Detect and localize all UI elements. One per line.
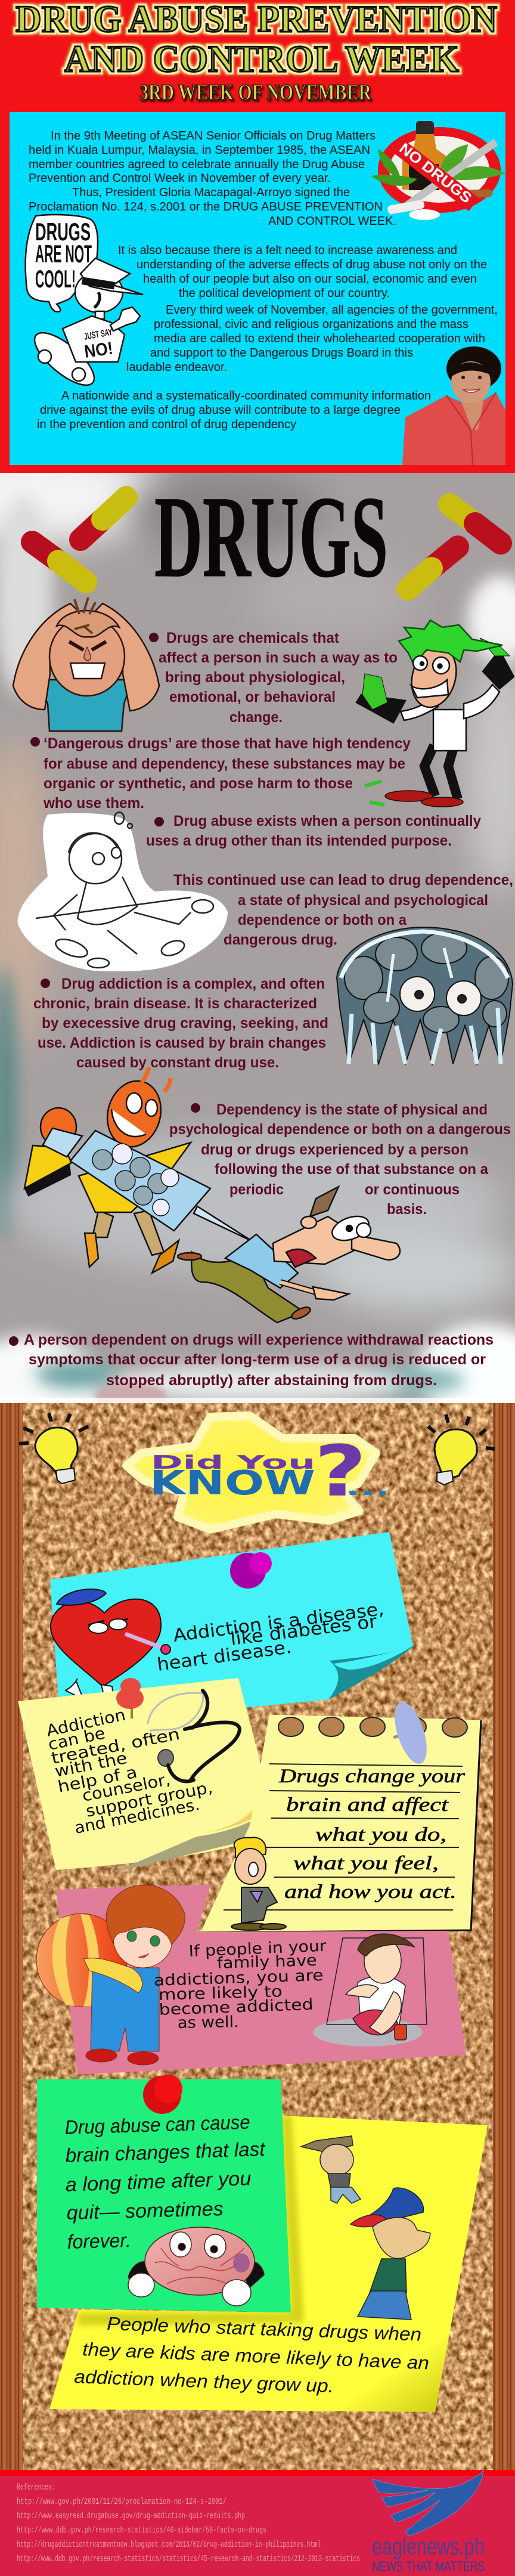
note: family addictions	[36, 1884, 466, 2075]
note text: Addiction is a disease,	[172, 1599, 385, 1646]
introduction text	[29, 129, 498, 431]
note text	[64, 2111, 266, 2253]
logo: eagle news: eaglenews.ph	[372, 2534, 485, 2560]
introduction text: health of our people but also on our social, economic and even	[143, 272, 477, 286]
illustration: worried man	[231, 1837, 286, 1930]
note text: support group,	[84, 1778, 214, 1821]
text: dangerous drugs: organic or synthetic, and pose harm to those	[44, 775, 353, 792]
heading: did you know: ?	[314, 1430, 367, 1512]
introduction text: laudable endeavor.	[126, 360, 227, 374]
note text: with the	[53, 1749, 129, 1781]
text: withdrawal: A person dependent on drugs will experience withdrawal reactions	[24, 1332, 494, 1348]
introduction text: Every third week of November, all agencies of the government,	[166, 303, 498, 317]
note: drugs change your brain	[201, 1698, 481, 1933]
panel: header background	[0, 0, 515, 473]
note text: what you do,	[315, 1824, 446, 1846]
note text: Drug abuse can cause	[64, 2111, 250, 2138]
text: drugs are chemicals: change.	[229, 709, 283, 726]
panel: corkboard	[0, 1403, 515, 2470]
icon: magenta pin	[230, 1552, 272, 1589]
speech bubble: ARE NOT	[35, 240, 92, 268]
references: References:	[17, 2482, 55, 2493]
illustration: brain	[128, 2227, 264, 2306]
text: drug addiction	[33, 976, 328, 1071]
text: dangerous drugs: for abuse and dependency, these substances may be	[44, 756, 405, 772]
introduction text: understanding of the adverse effects of drug abuse not only on the	[136, 258, 487, 271]
text: drug abuse: This continued use can lead to drug dependence,	[173, 872, 513, 888]
text: drug abuse: dangerous drug.	[224, 931, 337, 948]
subtitle: 3RD WEEK OF NOVEMBER	[139, 80, 372, 105]
introduction text: AND CONTROL WEEK.	[268, 214, 396, 228]
note text: a long time after you	[65, 2167, 252, 2196]
introduction text: Proclamation No. 124, s.2001 or the DRUG ABUSE PREVENTION	[29, 200, 383, 213]
illustration: sitting kid	[313, 1934, 427, 2046]
note text: become addicted	[159, 1996, 314, 2019]
text: dependency	[169, 1101, 511, 1218]
text: drug addiction: use. Addiction is caused by brain changes	[38, 1035, 326, 1051]
text: withdrawal	[9, 1332, 494, 1389]
introduction text: In the 9th Meeting of ASEAN Senior Officials on Drug Matters	[51, 129, 376, 143]
introduction text: A nationwide and a systematically-coordinated community information	[61, 389, 431, 402]
note text	[74, 2313, 430, 2397]
text: withdrawal: symptoms that occur after long-term use of a drug is reduced or	[29, 1351, 486, 1368]
note text: brain and affect	[286, 1794, 449, 1816]
note text	[45, 1705, 214, 1838]
icon: light bulb left	[19, 1413, 88, 1484]
text: withdrawal: stopped abruptly) after abstaining from drugs.	[106, 1372, 437, 1389]
icon: capsules right	[408, 504, 501, 589]
text: drug abuse: dependence or both on a	[238, 912, 407, 928]
references: http://drugaddictiontreatmentnow.blogspot.com/2013/02/drug-addiction-in-philippines.html	[17, 2540, 321, 2550]
icon: no drugs sign: NO DRUGS	[396, 140, 475, 207]
text: dependency: periodic	[229, 1181, 284, 1198]
text: drug abuse	[146, 813, 513, 948]
speech bubble: COOL!	[35, 265, 76, 293]
text: dependency: Dependency is the state of physical and	[216, 1101, 488, 1118]
text: drugs are chemicals: bring about physiological,	[165, 669, 345, 686]
introduction text: the political development of our country.	[179, 286, 390, 300]
note text	[153, 1937, 327, 2032]
introduction text: professional, civic and religious organizations and the mass	[154, 317, 469, 331]
icon: stethoscope	[148, 1690, 240, 1781]
illustration: devil with syringe	[24, 1067, 253, 1273]
introduction text: held in Kuala Lumpur, Malaysia, in September 1985, the ASEAN	[29, 143, 370, 157]
title	[15, 0, 497, 80]
introduction text: media are called to extend their wholehearted cooperation with	[154, 332, 485, 345]
note text: Addiction	[45, 1705, 128, 1741]
text: drug addiction: chronic, brain disease. It is characterized	[33, 995, 317, 1012]
references	[17, 2482, 360, 2564]
icon: sick heart	[51, 1589, 170, 1705]
note text: forever.	[67, 2229, 131, 2253]
introduction text: member countries agreed to celebrate annually the Drug Abuse	[29, 157, 365, 171]
illustration: big boy in cap	[350, 2188, 430, 2320]
text: drug abuse: uses a drug other than its intended purpose.	[146, 832, 452, 849]
note text: what you feel,	[293, 1853, 439, 1874]
text: dangerous drugs: who use them.	[43, 795, 144, 812]
note text: more likely to	[158, 1983, 283, 2004]
speech bubble	[26, 215, 98, 312]
text: dangerous drugs	[30, 735, 411, 812]
illustration: small slouching guy	[301, 2136, 361, 2203]
text: drug addiction: by execessive drug craving, seeking, and	[42, 1015, 328, 1032]
introduction text: It is also because there is a felt need to increase awareness and	[118, 243, 457, 257]
illustration: drugs are not cool character: JUST SAY	[83, 327, 113, 342]
note text: as well.	[178, 2013, 239, 2032]
note text: brain changes that last	[65, 2138, 266, 2166]
speech bubble: DRUGS	[35, 218, 91, 246]
note text	[278, 1766, 465, 1903]
icon: capsules left	[32, 497, 126, 582]
note: addiction can be treated	[18, 1678, 297, 1872]
note text: and medicines.	[73, 1795, 201, 1838]
illustration: drugs are not cool character	[26, 215, 143, 394]
references: http://www.ddb.gov.ph/research-statistics/46-sidebar/58-facts-on-drugs	[17, 2525, 266, 2535]
illustration: angry boy	[13, 597, 159, 731]
note text: People who start taking drugs when	[107, 2313, 422, 2345]
text: dependency: basis.	[387, 1201, 427, 1218]
text: dependency: or continuous	[365, 1181, 460, 1198]
heading: did you know: KNOW	[150, 1464, 315, 1503]
note text: they are kids are more likely to have an	[82, 2339, 430, 2373]
text: drugs are chemicals: Drugs are chemicals that	[166, 630, 340, 646]
note text: help of a	[56, 1763, 139, 1797]
text: drug abuse: Drug abuse exists when a person continually	[173, 813, 481, 829]
note text: quit— sometimes	[66, 2197, 224, 2224]
illustration: drugs are not cool character: NO!	[83, 339, 114, 362]
title: AND CONTROL WEEK	[64, 38, 459, 80]
text: drugs are chemicals	[149, 630, 398, 726]
note text: addictions, you are	[153, 1967, 324, 1990]
text: drug addiction: Drug addiction is a complex, and often	[61, 976, 325, 992]
text: drug addiction: caused by constant drug use.	[76, 1054, 279, 1071]
references: http://www.gov.ph/2001/11/26/proclamation-no-124-s-2001/	[17, 2497, 227, 2507]
note text	[156, 1599, 385, 1676]
illustration: frozen brain	[337, 927, 513, 1064]
illustration: running man	[178, 1187, 400, 1323]
note: brain changes	[37, 2075, 291, 2312]
icon: red pin	[143, 2075, 182, 2114]
text: drugs are chemicals: emotional, or behavioral	[169, 689, 336, 705]
note: addiction is a disease	[50, 1532, 413, 1708]
references: http://www.easyread.drugabuse.gov/drug-addiction-quiz-results.php	[17, 2511, 245, 2521]
text: dependency: following the use of that substance on a	[215, 1161, 489, 1178]
heading: did you know: ...	[346, 1476, 390, 1500]
note text: heart disease.	[156, 1637, 293, 1676]
note text: can be	[46, 1724, 107, 1754]
icon: light bulb right	[428, 1414, 495, 1485]
panel: introduction	[10, 112, 505, 465]
note text: like diabetes or	[229, 1611, 379, 1650]
panel: footer	[0, 2470, 515, 2576]
introduction text: Prevention and Control Week in November of every year.	[29, 171, 331, 185]
text: dangerous drugs: ‘Dangerous drugs’ are those that have high tendency	[44, 735, 411, 752]
skateboard	[27, 324, 102, 394]
icon: no drugs sign	[371, 121, 505, 220]
heading: did you know: Did You	[151, 1452, 315, 1473]
heading: did you know	[126, 1416, 390, 1530]
note text: If people in your	[188, 1937, 327, 1961]
text: drug abuse: a state of physical and psychological	[238, 892, 488, 909]
illustration: passed out boy	[18, 812, 228, 971]
text: dependency: drug or drugs experienced by a person	[201, 1141, 469, 1158]
introduction text: in the prevention and control of drug dependency	[37, 417, 297, 431]
logo: eagle news	[372, 2470, 485, 2575]
note text: Drugs change your	[278, 1766, 465, 1787]
icon: red pin	[116, 1678, 144, 1719]
note text: treated, often	[49, 1725, 181, 1768]
panel: drugs section background	[0, 447, 515, 1443]
icon: blue tack	[388, 1698, 433, 1767]
note text: and how you act.	[284, 1881, 457, 1903]
illustration: boy with ball	[36, 1885, 185, 2065]
note text: addiction when they grow up.	[74, 2366, 334, 2397]
note text: family have	[216, 1952, 317, 1973]
photo: president portrait	[402, 346, 505, 465]
introduction text: Thus, President Gloria Macapagal-Arroyo signed the	[72, 185, 350, 199]
introduction text: drive against the evils of drug abuse will contribute to a large degree	[40, 403, 401, 417]
text: drugs are chemicals: affect a person in such a way as to	[159, 649, 398, 666]
introduction text: and support to the Dangerous Drugs Board in this	[150, 346, 413, 360]
note: people who start taking drugs	[49, 2116, 488, 2412]
illustration: mad scientist	[356, 620, 514, 807]
note text: counselor,	[80, 1770, 172, 1806]
